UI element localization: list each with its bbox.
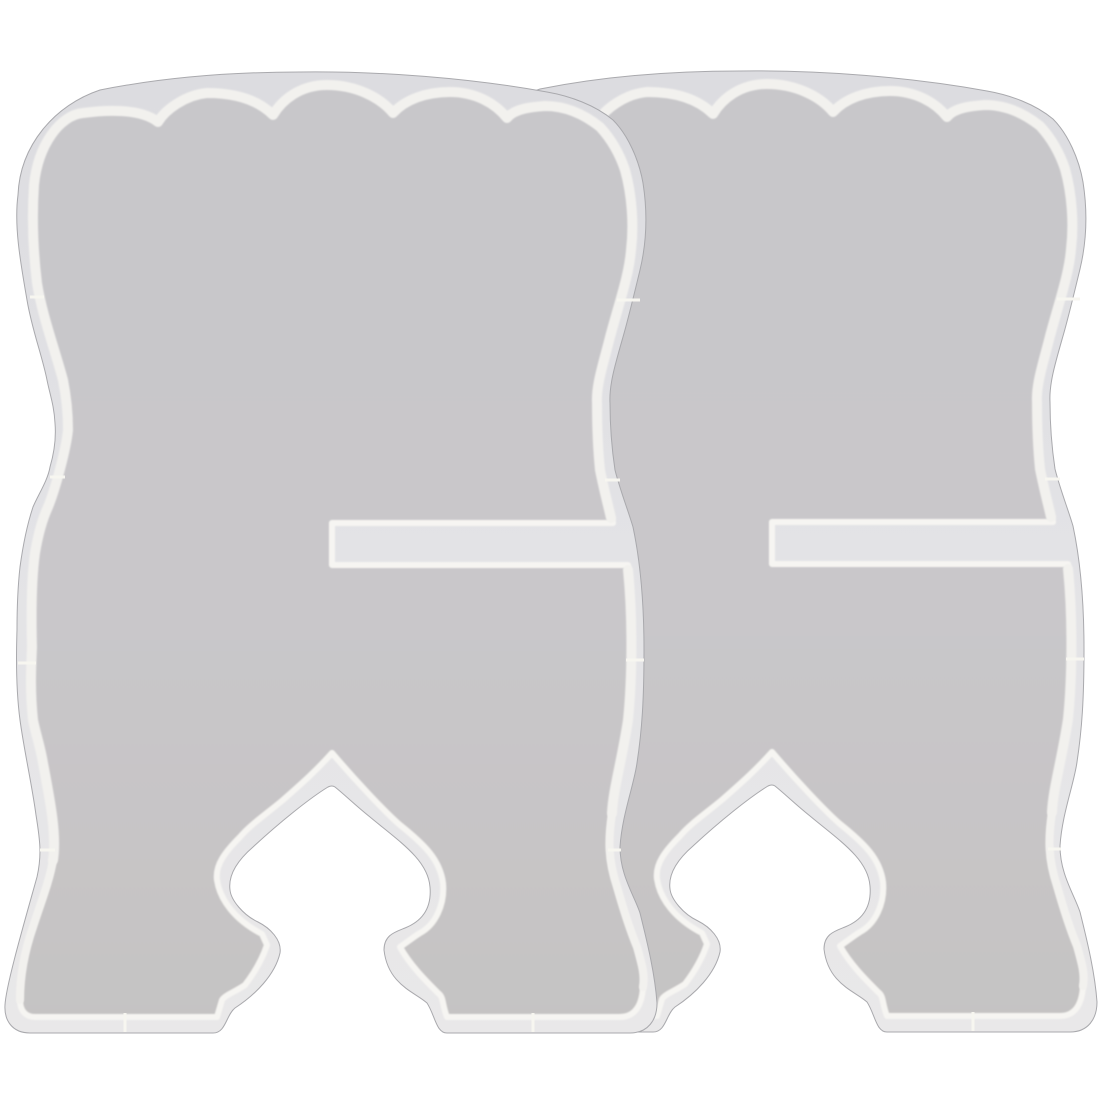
right mold cavity and ridge xyxy=(460,84,1084,1016)
right mold seam ticks xyxy=(458,296,1084,1031)
left mold wide side and scalloped ridge xyxy=(31,85,632,860)
left mold cavity and ridge xyxy=(20,85,644,1017)
right mold wide side and scalloped ridge xyxy=(471,84,1072,859)
right mold flange xyxy=(445,71,1097,1032)
left mold seam ticks xyxy=(18,297,644,1032)
left mold flange xyxy=(5,72,657,1033)
left mold lower side ridge xyxy=(20,813,644,1000)
right mold xyxy=(445,71,1097,1032)
left mold xyxy=(5,72,657,1033)
right mold lower side ridge xyxy=(460,812,1084,999)
